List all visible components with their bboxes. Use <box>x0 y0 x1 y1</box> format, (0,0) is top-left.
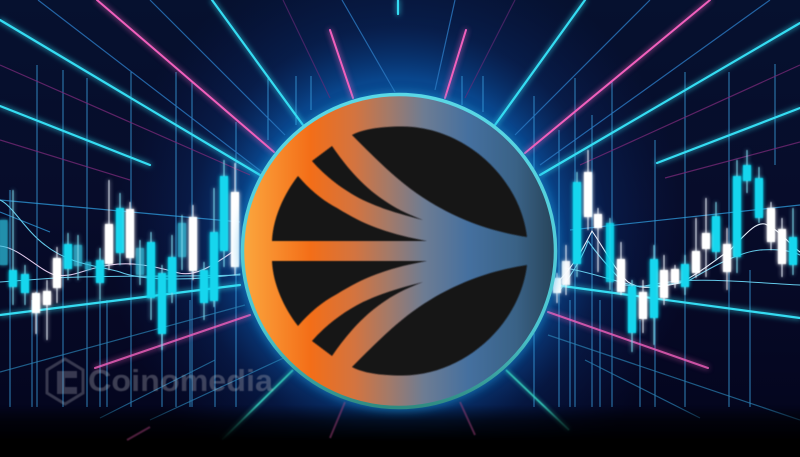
candlesticks: right chart <box>553 150 797 352</box>
chart grid lines <box>10 64 775 407</box>
wordmark: Coinomedia <box>88 363 274 398</box>
neon rays: cyan <box>0 0 800 318</box>
moving average curves: right <box>555 224 800 290</box>
faded floor rays <box>127 402 475 440</box>
moving average curves: left <box>0 200 240 282</box>
watermark: Coinomedia <box>47 359 274 404</box>
dim cyan candles <box>0 220 186 275</box>
coin logo <box>240 92 558 410</box>
neon rays: pink <box>95 0 710 368</box>
neon rays: lower teal <box>222 370 569 440</box>
logo mark <box>272 126 527 376</box>
cyan candles <box>573 150 797 352</box>
cyan candles <box>9 160 228 350</box>
white candles <box>32 163 239 340</box>
bottom fade <box>0 405 800 457</box>
lower blades <box>272 261 527 376</box>
icon: hexagon logo <box>47 359 83 404</box>
candlesticks: left chart <box>0 160 239 350</box>
upper blades <box>272 126 527 241</box>
coin disc <box>242 94 556 408</box>
white candles <box>553 150 786 333</box>
coin glow <box>240 92 558 410</box>
